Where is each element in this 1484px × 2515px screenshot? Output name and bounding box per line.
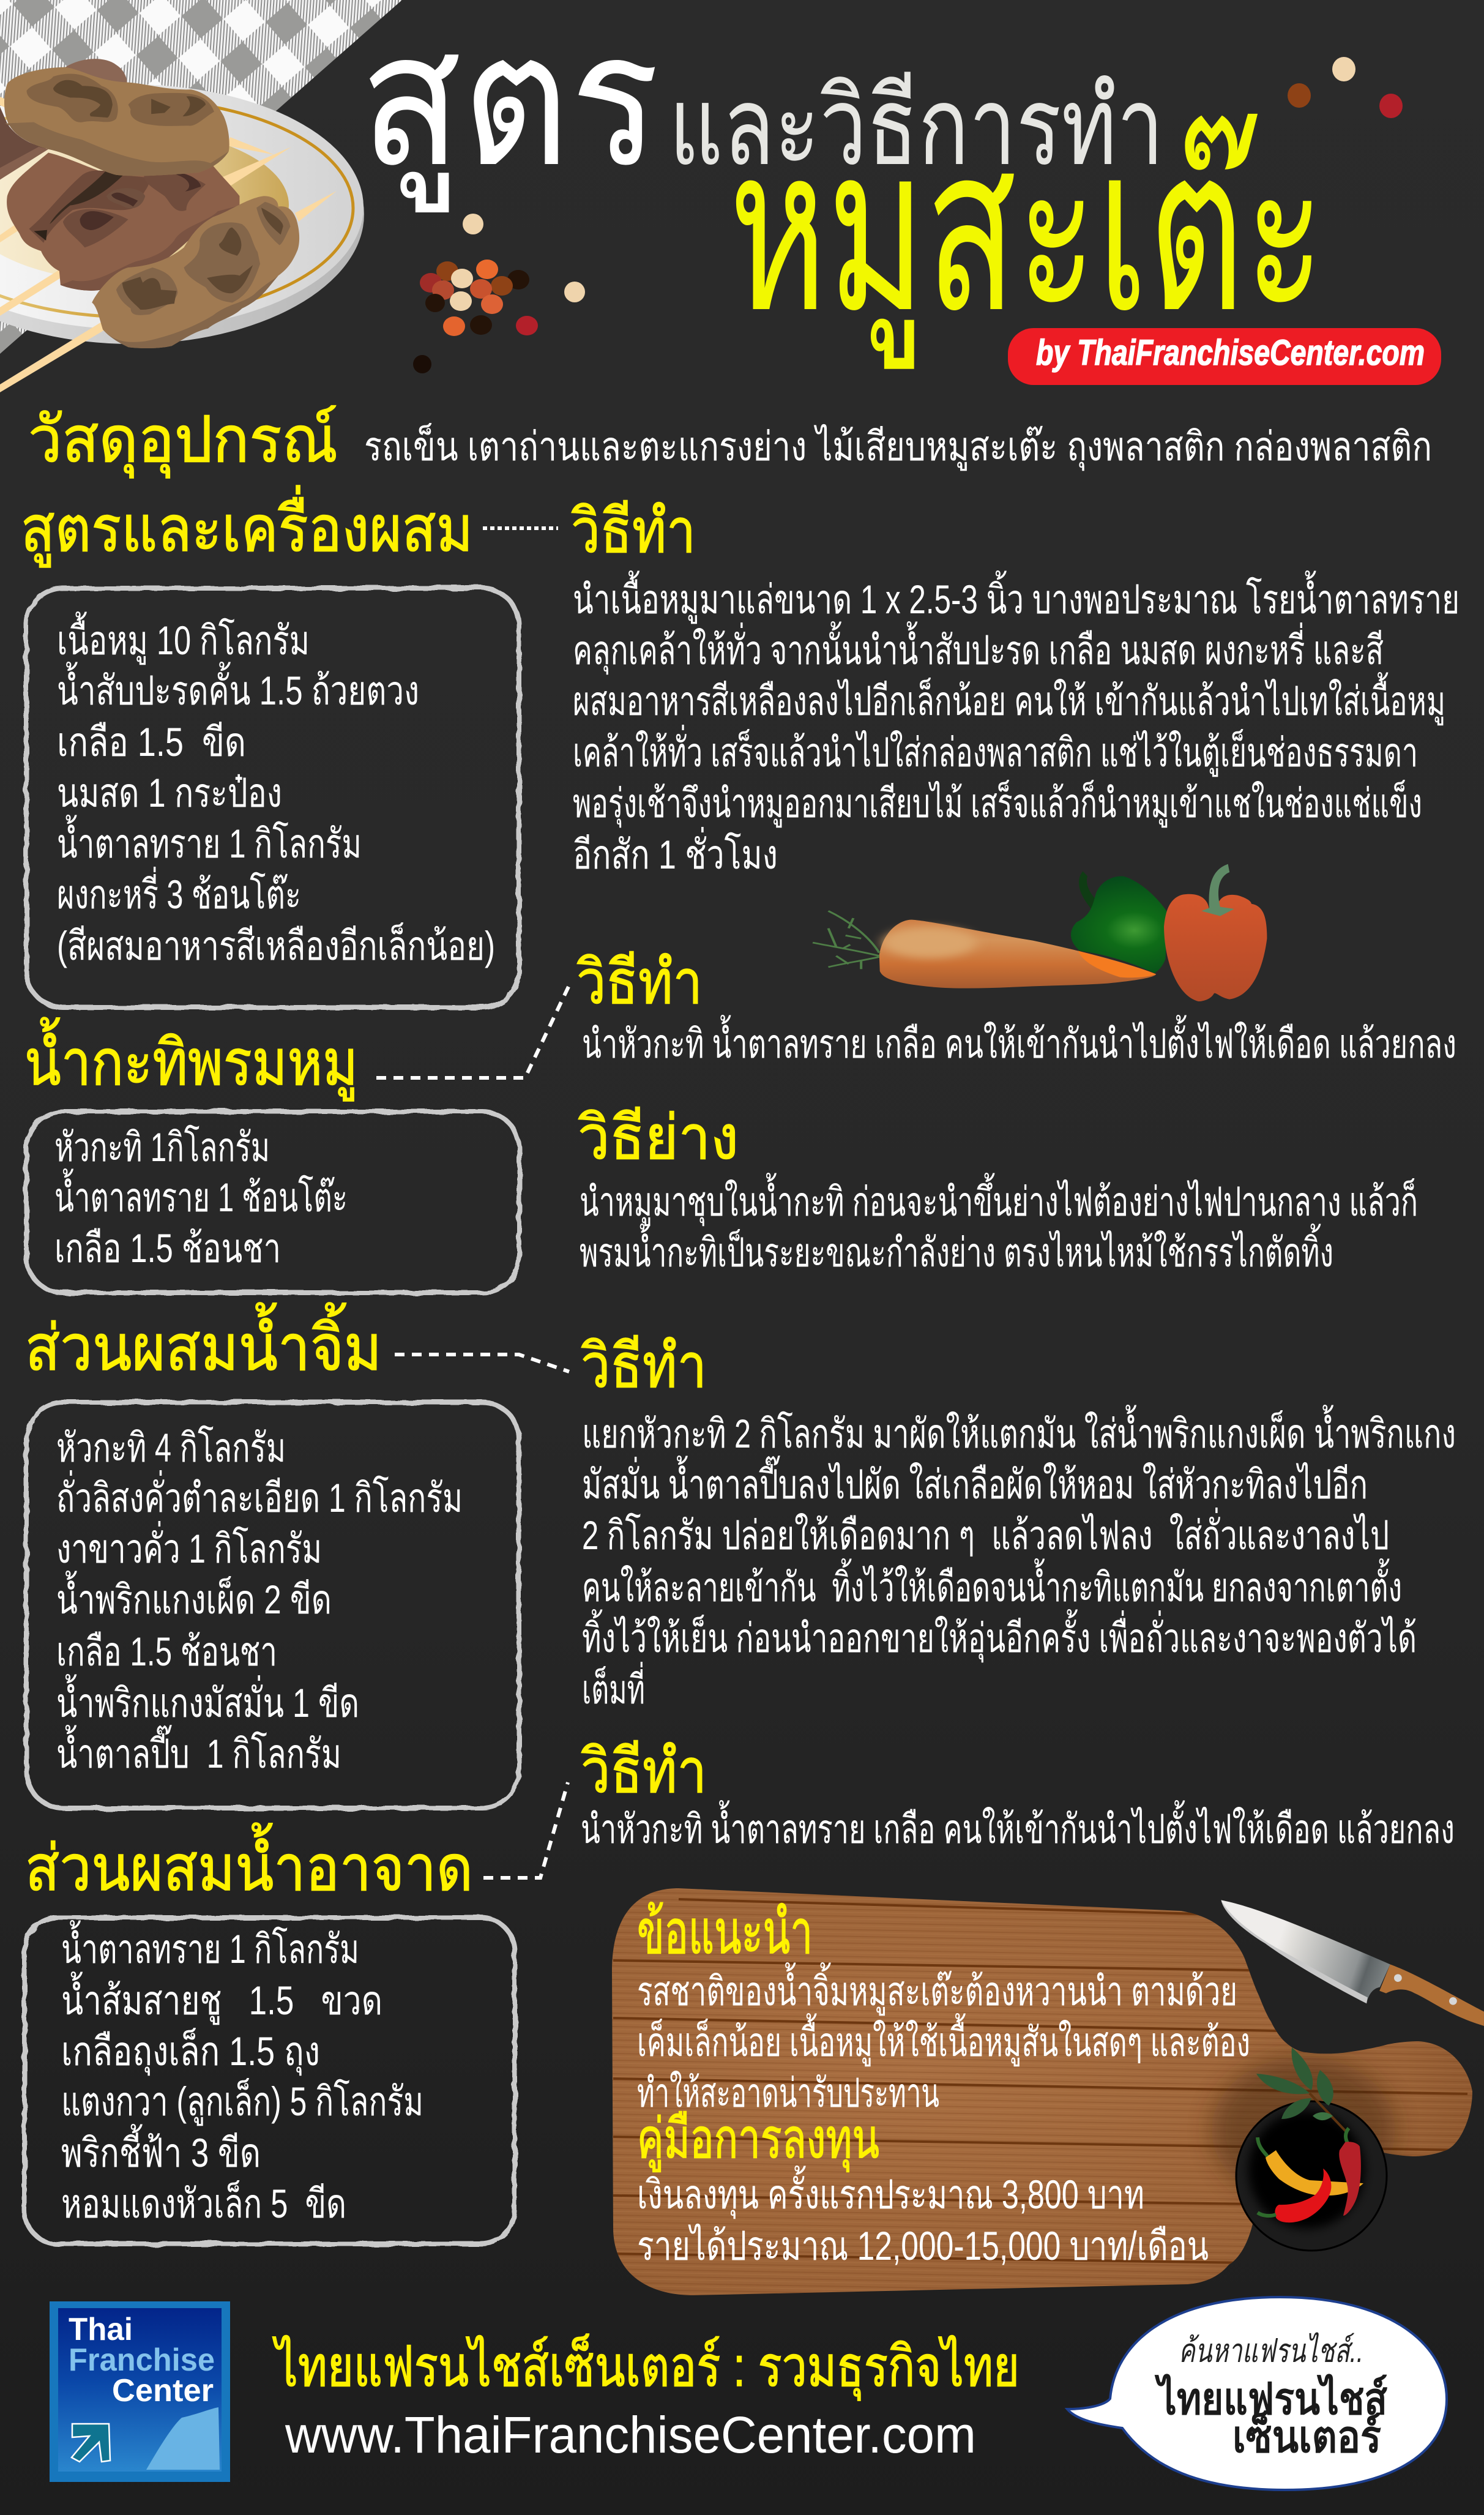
- panel: ingredients: ผงกะหรี่ 3 ช้อนโต๊ะ: [57, 867, 301, 917]
- heading: coconut basting: น้ำกะทิพรมหมู: [24, 1017, 358, 1102]
- panel: dipping sauce ingredients: หัวกะทิ 4 กิโลกรัม: [56, 1425, 286, 1470]
- text block: method 3: เต็มที่: [582, 1662, 645, 1712]
- text block: advice: [637, 1962, 1250, 2115]
- heading: advice: ข้อแนะนำ: [637, 1898, 813, 1967]
- panel: ingredients: น้ำตาลทราย 1 กิโลกรัม: [57, 815, 362, 866]
- panel: ingredients: เกลือ 1.5 ขีด: [57, 719, 246, 764]
- panel: dipping sauce ingredients: ถั่วลิสงคั่วตำละเอียด 1 กิโลกรัม: [56, 1470, 463, 1520]
- panel: ingredients: เนื้อหมู 10 กิโลกรัม: [57, 611, 310, 665]
- callout: speech bubble: เซ็นเตอร์: [1232, 2410, 1381, 2462]
- text block: advice: รสชาติของน้ำจิ้มหมูสะเต๊ะต้องหวานนำ ตามด้วย: [637, 1962, 1237, 2016]
- illustration: plate of pork satay: [0, 59, 364, 392]
- panel: basting ingredients: [26, 1112, 519, 1293]
- callout: speech bubble: ไทยแฟรนไชส์: [1154, 2373, 1387, 2424]
- text block: investment: รายได้ประมาณ 12,000-15,000 บาท/เดือน: [637, 2223, 1209, 2268]
- title: white line: [360, 0, 1164, 213]
- heading: method 3: วิธีทำ: [581, 1332, 707, 1400]
- logo: Thai Franchise Center: Franchise: [69, 2342, 215, 2378]
- callout: speech bubble: [1067, 2297, 1447, 2490]
- panel: ajad sauce ingredients: [24, 1918, 515, 2244]
- badge: by ThaiFranchiseCenter.com: [1008, 328, 1441, 385]
- heading: dipping sauce: ส่วนผสมน้ำจิ้ม: [25, 1302, 382, 1384]
- panel: dipping sauce ingredients: น้ำพริกแกงเผ็ด 2 ขีด: [56, 1571, 332, 1622]
- peppercorns: [413, 57, 1403, 373]
- panel: ingredients: นมสด 1 กระป๋อง: [57, 770, 282, 815]
- panel: ingredients: น้ำสับปะรดคั้น 1.5 ถ้วยตวง: [57, 662, 419, 713]
- connector: basting to method: [376, 985, 569, 1078]
- heading: method 2: วิธีทำ: [576, 948, 703, 1017]
- panel: ingredients: (สีผสมอาหารสีเหลืองอีกเล็กน้อย): [57, 922, 495, 968]
- text block: grilling method: [580, 1173, 1418, 1275]
- connector: dipping sauce to method: [395, 1355, 569, 1372]
- panel: basting ingredients: เกลือ 1.5 ช้อนชา: [54, 1225, 281, 1271]
- panel: ajad sauce ingredients: พริกชี้ฟ้า 3 ขีด: [61, 2124, 261, 2175]
- text block: method 1: อีกสัก 1 ชั่วโมง: [573, 827, 778, 877]
- illustration: carrot and peppers: [813, 864, 1267, 1001]
- panel: dipping sauce ingredients: [26, 1402, 519, 1808]
- footer: website url: www.ThaiFranchiseCenter.com: [285, 2406, 976, 2464]
- panel: basting ingredients: หัวกะทิ 1กิโลกรัม: [54, 1124, 270, 1170]
- footer: company name: ไทยแฟรนไชส์เซ็นเตอร์ : รวมธุรกิจไทย: [272, 2333, 1020, 2401]
- panel: ajad sauce ingredients: น้ำตาลทราย 1 กิโลกรัม: [61, 1920, 359, 1971]
- panel: dipping sauce ingredients: น้ำพริกแกงมัสมั่น 1 ขีด: [56, 1674, 359, 1725]
- text block: investment: [637, 2166, 1209, 2268]
- panel: ajad sauce ingredients: เกลือถุงเล็ก 1.5 ถุง: [61, 2027, 320, 2076]
- logo: Thai Franchise Center: [50, 2301, 230, 2482]
- icon: bowl of chillies with leaves: [1236, 2047, 1387, 2251]
- panel: dipping sauce ingredients: งาขาวคั่ว 1 กิโลกรัม: [56, 1521, 322, 1571]
- panel: basting ingredients: น้ำตาลทราย 1 ช้อนโต๊ะ: [54, 1168, 348, 1220]
- heading: method 1: วิธีทำ: [571, 497, 696, 566]
- text block: method 3: [582, 1405, 1456, 1712]
- title: white line: และวิธีการทำ: [669, 65, 1164, 187]
- logo: Thai Franchise Center: Center: [112, 2373, 214, 2408]
- panel: wooden cutting board: [606, 1885, 1481, 2301]
- heading: ajad sauce: ส่วนผสมน้ำอาจาด: [25, 1823, 473, 1904]
- text block: advice: ทำให้สะอาดน่ารับประทาน: [637, 2070, 939, 2115]
- connector: ingredients to method: [483, 526, 558, 530]
- panel: ajad sauce ingredients: แตงกวา (ลูกเล็ก) 5 กิโลกรัม: [61, 2077, 423, 2126]
- materials heading: วัสดุอุปกรณ์: [28, 405, 338, 479]
- connector: ajad sauce to method: [483, 1782, 568, 1878]
- text block: investment: เงินลงทุน ครั้งแรกประมาณ 3,800 บาท: [637, 2166, 1144, 2219]
- panel: ajad sauce ingredients: น้ำส้มสายชู 1.5 ขวด: [61, 1971, 382, 2025]
- text block: method 1: [573, 570, 1460, 877]
- heading: method 4: วิธีทำ: [581, 1737, 707, 1806]
- heading: grilling method: วิธีย่าง: [578, 1104, 739, 1172]
- heading: recipe and ingredients: สูตรและเครื่องผสม: [21, 485, 473, 568]
- heading: investment guide: คู่มือการลงทุน: [637, 2109, 879, 2172]
- icon: knife: [1221, 1900, 1484, 2026]
- tablecloth corner: [0, 0, 402, 354]
- panel: ajad sauce ingredients: หอมแดงหัวเล็ก 5 ขีด: [61, 2180, 346, 2226]
- title: white line: สูตร: [360, 0, 660, 213]
- callout: speech bubble: ค้นหาแฟรนไชส์..: [1179, 2332, 1363, 2369]
- panel: dipping sauce ingredients: น้ำตาลปี๊บ 1 กิโลกรัม: [56, 1724, 341, 1776]
- panel: dipping sauce ingredients: เกลือ 1.5 ช้อนชา: [56, 1629, 277, 1674]
- panel: ingredients: [26, 588, 519, 1007]
- logo: Thai Franchise Center: Thai: [69, 2312, 133, 2347]
